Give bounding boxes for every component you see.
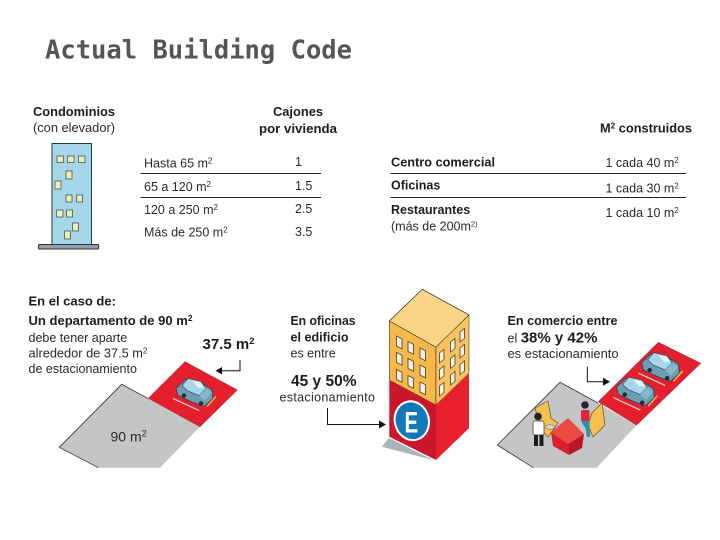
table: cajones por vivienda: 65 a 120 m <box>144 180 207 194</box>
table: cajones por vivienda: 1 <box>295 155 302 169</box>
panel: condominios heading <box>33 105 115 135</box>
table: cajones por vivienda: Cajones <box>273 105 323 119</box>
icon: left chair <box>535 401 558 437</box>
icon: car upper <box>638 353 683 386</box>
text block: en el caso de: de estacionamiento <box>28 362 137 376</box>
table: cajones por vivienda: 2 <box>208 156 213 166</box>
table: cajones por vivienda: por vivienda <box>259 122 338 136</box>
table: metros cuadrados construidos: 2 <box>674 156 679 165</box>
panel: condominios heading: (con elevador) <box>33 121 115 135</box>
diagram: departamento and parking plot <box>59 362 237 468</box>
table: cajones por vivienda: 3.5 <box>295 225 312 239</box>
text block: en el caso de: debe tener aparte <box>28 331 127 345</box>
icon: condominium tower <box>38 144 98 249</box>
text block: comercio: es estacionamiento <box>508 347 619 361</box>
table: cajones por vivienda: 2 <box>214 203 218 212</box>
text block: comercio: En comercio entre <box>508 314 618 328</box>
icon: office building with parking <box>382 289 469 460</box>
table: metros cuadrados construidos: 2 <box>674 206 679 215</box>
table: metros cuadrados construidos <box>390 122 692 234</box>
text block: comercio: el 38% y 42% <box>508 330 597 346</box>
table: metros cuadrados construidos: 2) <box>471 220 478 228</box>
text block: oficinas <box>280 314 375 404</box>
table: cajones por vivienda <box>140 105 338 240</box>
icon: car lower <box>613 377 658 410</box>
arrow: to commerce parking <box>587 367 610 386</box>
table: metros cuadrados construidos: 1 cada 10 m <box>606 206 674 220</box>
table: metros cuadrados construidos: Oficinas <box>391 178 440 192</box>
table: cajones por vivienda: 1.5 <box>295 179 312 193</box>
table: metros cuadrados construidos: 2 <box>611 122 616 130</box>
icon: waiter <box>533 413 554 446</box>
table: metros cuadrados construidos: Restaurantes <box>391 203 470 217</box>
table: metros cuadrados construidos: Centro comercial <box>391 156 495 170</box>
icon: customer <box>581 401 590 437</box>
text block: oficinas: estacionamiento <box>280 390 375 404</box>
text block: en el caso de: 2 <box>188 314 193 323</box>
text block: oficinas: es entre <box>290 346 336 360</box>
label: 90 m2: 2 <box>142 428 147 438</box>
table: cajones por vivienda: 2 <box>207 180 212 189</box>
text block: en el caso de: 2 <box>143 346 148 356</box>
table: metros cuadrados construidos: M <box>600 122 610 136</box>
icon: right chair <box>588 403 605 437</box>
label: 90 m2: 90 m <box>110 428 142 444</box>
table: metros cuadrados construidos: 2 <box>674 182 679 190</box>
table: cajones por vivienda: 120 a 250 m <box>144 203 214 217</box>
callout: 37.5 m2: 2 <box>249 336 254 347</box>
text block: oficinas: En oficinas <box>290 314 356 328</box>
table: metros cuadrados construidos: 1 cada 40 m <box>606 156 674 170</box>
callout: 37.5 m2 <box>202 336 254 374</box>
table: metros cuadrados construidos: (más de 200m <box>391 220 471 234</box>
text block: en el caso de: alrededor de 37.5 m <box>28 346 140 360</box>
panel: condominios heading: Condominios <box>33 105 115 119</box>
table: cajones por vivienda: Hasta 65 m <box>144 156 208 170</box>
icon: red table <box>551 418 584 455</box>
table: metros cuadrados construidos: 1 cada 30 m <box>606 182 674 196</box>
text block: oficinas: el edificio <box>290 330 349 344</box>
text block: en el caso de <box>28 294 193 376</box>
text block: en el caso de: En el caso de: <box>28 294 116 308</box>
text block: en el caso de: Un departamento de 90 m <box>28 314 181 328</box>
text block: oficinas: 45 y 50% <box>291 373 357 390</box>
table: metros cuadrados construidos: construidos <box>615 122 692 136</box>
text block: comercio <box>508 314 619 361</box>
table: cajones por vivienda: 2.5 <box>295 202 312 216</box>
title: Actual Building Code <box>45 36 352 66</box>
diagram: commerce floor and parking <box>497 342 701 468</box>
icon: parking E sign <box>390 397 433 444</box>
arrow: to office parking <box>328 408 386 428</box>
icon: car <box>173 378 216 410</box>
table: cajones por vivienda: 2 <box>223 226 228 234</box>
table: cajones por vivienda: Más de 250 m <box>144 226 223 240</box>
callout: 37.5 m2: 37.5 m <box>202 336 249 353</box>
icon: parking E sign: E <box>404 407 418 440</box>
